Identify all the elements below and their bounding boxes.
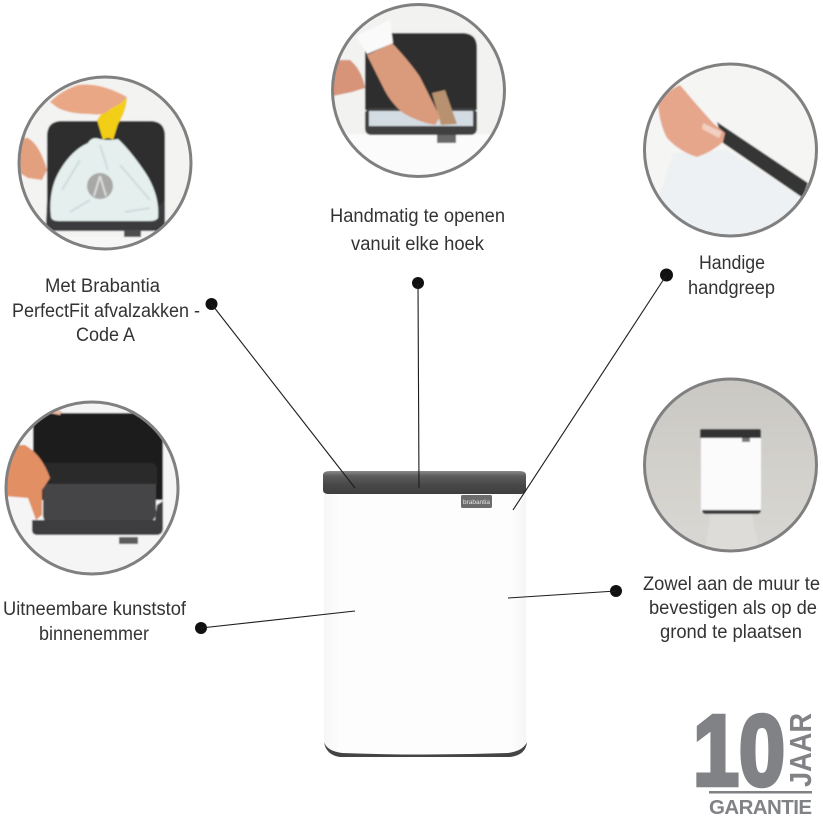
bin body	[645, 150, 803, 240]
hand left	[15, 138, 47, 180]
inner bucket back	[45, 463, 157, 485]
text: opening from any angle: Handmatig te openen	[330, 206, 505, 227]
badge: 10 jaar garantie: JAAR	[783, 713, 818, 787]
text: wall or floor: bevestigen als op de	[649, 598, 817, 619]
text: PerfectFit bags	[12, 276, 200, 346]
text: opening from any angle	[330, 206, 505, 255]
bin rim	[365, 108, 477, 135]
liner	[369, 111, 473, 126]
hand top	[50, 84, 127, 114]
bin lid interior	[47, 121, 165, 205]
bin body	[324, 494, 526, 753]
text: PerfectFit bags: Met Brabantia	[45, 276, 160, 297]
badge: 10 jaar garantie: 10	[693, 695, 785, 807]
waste bag	[50, 138, 158, 221]
connector: handle	[513, 268, 673, 510]
mini bin shadow	[705, 514, 760, 555]
bin lid	[323, 471, 526, 494]
text: wall or floor: grond te plaatsen	[660, 622, 802, 643]
bin base	[324, 742, 527, 757]
text: handle: handgreep	[688, 278, 775, 299]
lid interior	[365, 33, 477, 110]
connector: wall mounting	[508, 585, 622, 598]
text: removable inner bucket: binnenemmer	[39, 624, 150, 645]
tag	[124, 230, 141, 237]
tag	[119, 537, 138, 544]
handle band	[717, 122, 808, 198]
text: PerfectFit bags: Code A	[76, 325, 135, 346]
mini bin lid	[700, 429, 761, 438]
left hand	[330, 60, 365, 96]
bin tray	[46, 200, 165, 231]
text: handle	[688, 253, 775, 299]
text: PerfectFit bags: PerfectFit afvalzakken -	[12, 301, 200, 322]
mini tag	[742, 438, 750, 442]
hand	[3, 445, 50, 520]
mini bin body	[701, 436, 761, 512]
sleeve	[356, 20, 393, 54]
text: wall or floor	[643, 574, 820, 643]
lid interior	[33, 413, 163, 500]
text: wall or floor: Zowel aan de muur te	[643, 574, 820, 595]
text: removable inner bucket	[3, 599, 187, 645]
connector lines and dots	[195, 268, 673, 634]
connector: inner bucket	[195, 611, 355, 634]
brand tag	[461, 495, 492, 508]
panel: photo opening lid	[330, 2, 510, 182]
inner bucket front	[43, 484, 156, 522]
panel: photo wall mounted	[640, 375, 822, 557]
brand tag: brabantia	[463, 500, 491, 506]
connector: bag	[206, 298, 355, 488]
mini bin base	[702, 510, 761, 514]
cardboard roll	[432, 90, 457, 125]
panel: photo handle	[642, 61, 822, 241]
bag seal	[87, 173, 113, 199]
badge: 10 jaar garantie: GARANTIE	[709, 796, 812, 819]
text: opening from any angle: vanuit elke hoek	[351, 234, 484, 255]
text: removable inner bucket: Uitneembare kunststof	[3, 599, 187, 620]
text: handle: Handige	[699, 253, 765, 274]
product: white Brabantia bin	[323, 471, 527, 757]
panel: photo inner bucket	[3, 399, 183, 579]
yellow drawstring	[97, 98, 127, 140]
panel: photo PerfectFit bag	[15, 73, 195, 253]
connector: lid opening	[412, 277, 424, 488]
hand	[367, 43, 440, 125]
tray	[32, 501, 163, 535]
hand	[658, 85, 725, 157]
tag	[437, 135, 456, 143]
